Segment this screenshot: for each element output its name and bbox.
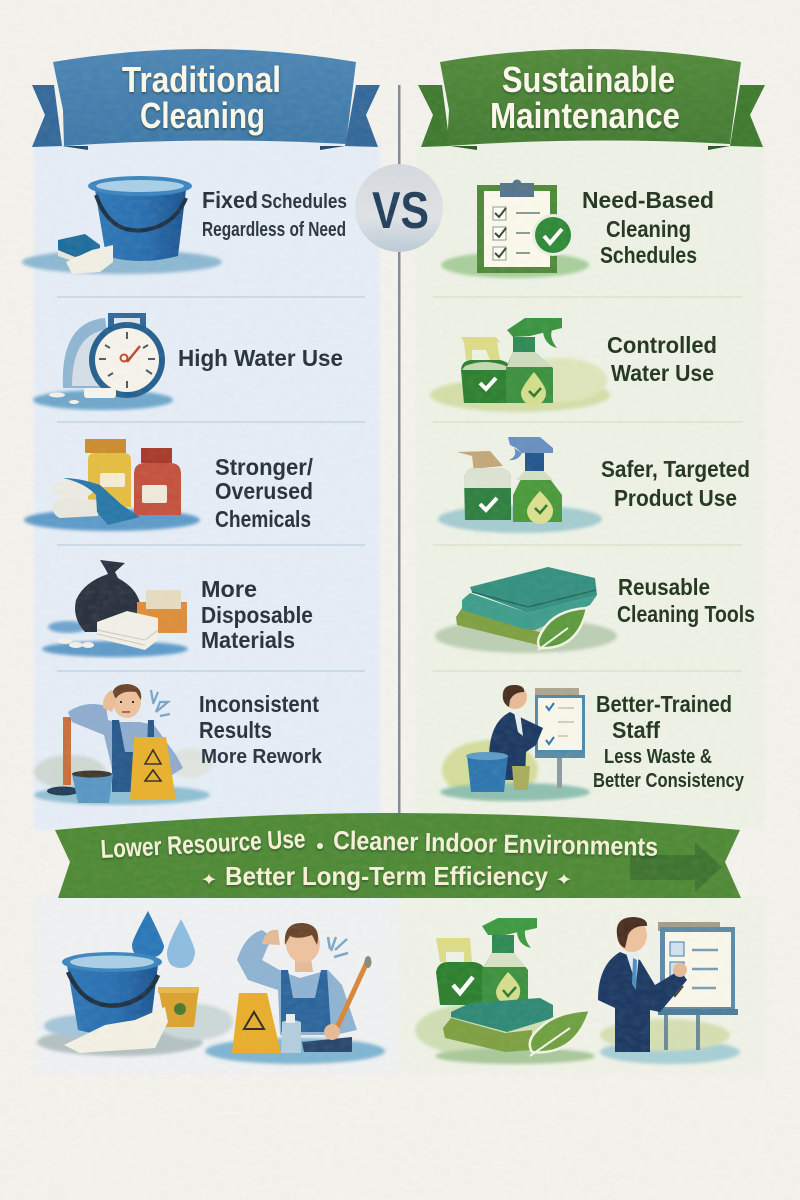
row 4 left: text: Materials bbox=[201, 627, 295, 653]
banner line 1: Lower Resource Use bbox=[100, 823, 306, 864]
VS badge: VS bbox=[372, 182, 429, 240]
row 1 right: text: Cleaning bbox=[606, 216, 691, 242]
panel: traditional column bbox=[34, 140, 380, 830]
banner line 1 bbox=[100, 823, 658, 864]
banner line 1: Cleaner Indoor Environments bbox=[333, 825, 658, 862]
row 4 right: towels and leaf icon bbox=[435, 567, 617, 653]
row 5 right: trainer icon bbox=[440, 685, 590, 801]
heading: sustainable: Maintenance bbox=[490, 95, 680, 136]
row 1 left: text: Regardless of Need bbox=[202, 219, 346, 241]
row 1 left: bucket icon bbox=[22, 176, 222, 274]
row 3 left: chemical bottles icon bbox=[24, 439, 200, 531]
bottom left: worker illustration bbox=[205, 923, 385, 1064]
banner line 2: ✦ bbox=[200, 872, 218, 889]
row 1 left: text: Fixed bbox=[202, 187, 258, 213]
row 5 left: text bbox=[199, 691, 323, 768]
panel: sustainable column bbox=[416, 140, 765, 830]
row 5 right: text: Better-Trained bbox=[596, 691, 732, 717]
row 1 left: text: Schedules bbox=[261, 191, 347, 213]
row 5 right: text: Less Waste & bbox=[604, 746, 712, 768]
result banner bbox=[55, 813, 741, 898]
worker figure bbox=[68, 684, 183, 792]
row 4 left: text: Disposable bbox=[201, 602, 313, 628]
row 1 right: text: Schedules bbox=[600, 242, 697, 268]
row 5 left: text: Results bbox=[199, 717, 272, 743]
row 2 left: stopwatch icon bbox=[33, 313, 173, 410]
row 2 right: text: Controlled bbox=[607, 332, 717, 358]
bottom right: trainer illustration bbox=[598, 917, 740, 1064]
row 5 right: text bbox=[593, 691, 745, 792]
heading: traditional: Traditional bbox=[122, 59, 281, 100]
row 3 right: text: Product Use bbox=[614, 485, 737, 511]
panel: lower right tint bbox=[400, 895, 765, 1075]
row 3 left: text: Chemicals bbox=[215, 506, 311, 532]
centre divider bbox=[398, 85, 400, 815]
row 4 right: text bbox=[617, 574, 755, 627]
row 2 left: text: High Water Use bbox=[178, 345, 343, 371]
row 4 right: text: Cleaning Tools bbox=[617, 601, 755, 627]
row 4 left: waste icon bbox=[42, 560, 188, 657]
row 3 right: spray bottles icon bbox=[438, 437, 602, 533]
arrow bbox=[630, 842, 722, 892]
heading: traditional: Cleaning bbox=[140, 95, 265, 136]
banner line 2: Better Long-Term Efficiency bbox=[225, 861, 548, 891]
row 3 left: text: Stronger/ bbox=[215, 454, 314, 480]
banner: sustainable maintenance bbox=[418, 49, 765, 150]
row 1 right: text bbox=[582, 187, 714, 268]
row 2 right: text bbox=[607, 332, 717, 386]
banner: traditional cleaning bbox=[32, 49, 380, 150]
row 5 left: confused worker icon bbox=[34, 684, 212, 805]
heading: traditional bbox=[122, 59, 281, 136]
bottom right: products illustration bbox=[415, 918, 595, 1064]
bottom left: bucket group illustration bbox=[37, 911, 233, 1056]
row 2 right: text: Water Use bbox=[611, 360, 714, 386]
row 3 left: text bbox=[215, 454, 314, 532]
row 5 left: text: Inconsistent bbox=[199, 691, 319, 717]
VS badge bbox=[355, 164, 443, 252]
banner line 2: ✦ bbox=[555, 872, 573, 889]
row 3 right: text: Safer, Targeted bbox=[601, 456, 750, 482]
row 1 left: text bbox=[202, 187, 347, 241]
row 4 left: text: More bbox=[201, 576, 257, 602]
row 3 left: text: Overused bbox=[215, 478, 313, 504]
row 4 left: text bbox=[201, 576, 313, 653]
row 2 right: green bottles icon bbox=[430, 318, 610, 412]
row 1 right: text: Need-Based bbox=[582, 187, 714, 213]
heading: sustainable bbox=[490, 59, 680, 136]
panel: lower left tint bbox=[34, 895, 400, 1075]
row 1 right: clipboard icon bbox=[441, 180, 589, 278]
row 5 right: text: Better Consistency bbox=[593, 770, 745, 792]
row 5 right: text: Staff bbox=[612, 717, 660, 743]
row 5 left: text: More Rework bbox=[201, 746, 323, 768]
heading: sustainable: Sustainable bbox=[502, 59, 675, 100]
row 3 right: text bbox=[601, 456, 750, 511]
row 4 right: text: Reusable bbox=[618, 574, 710, 600]
